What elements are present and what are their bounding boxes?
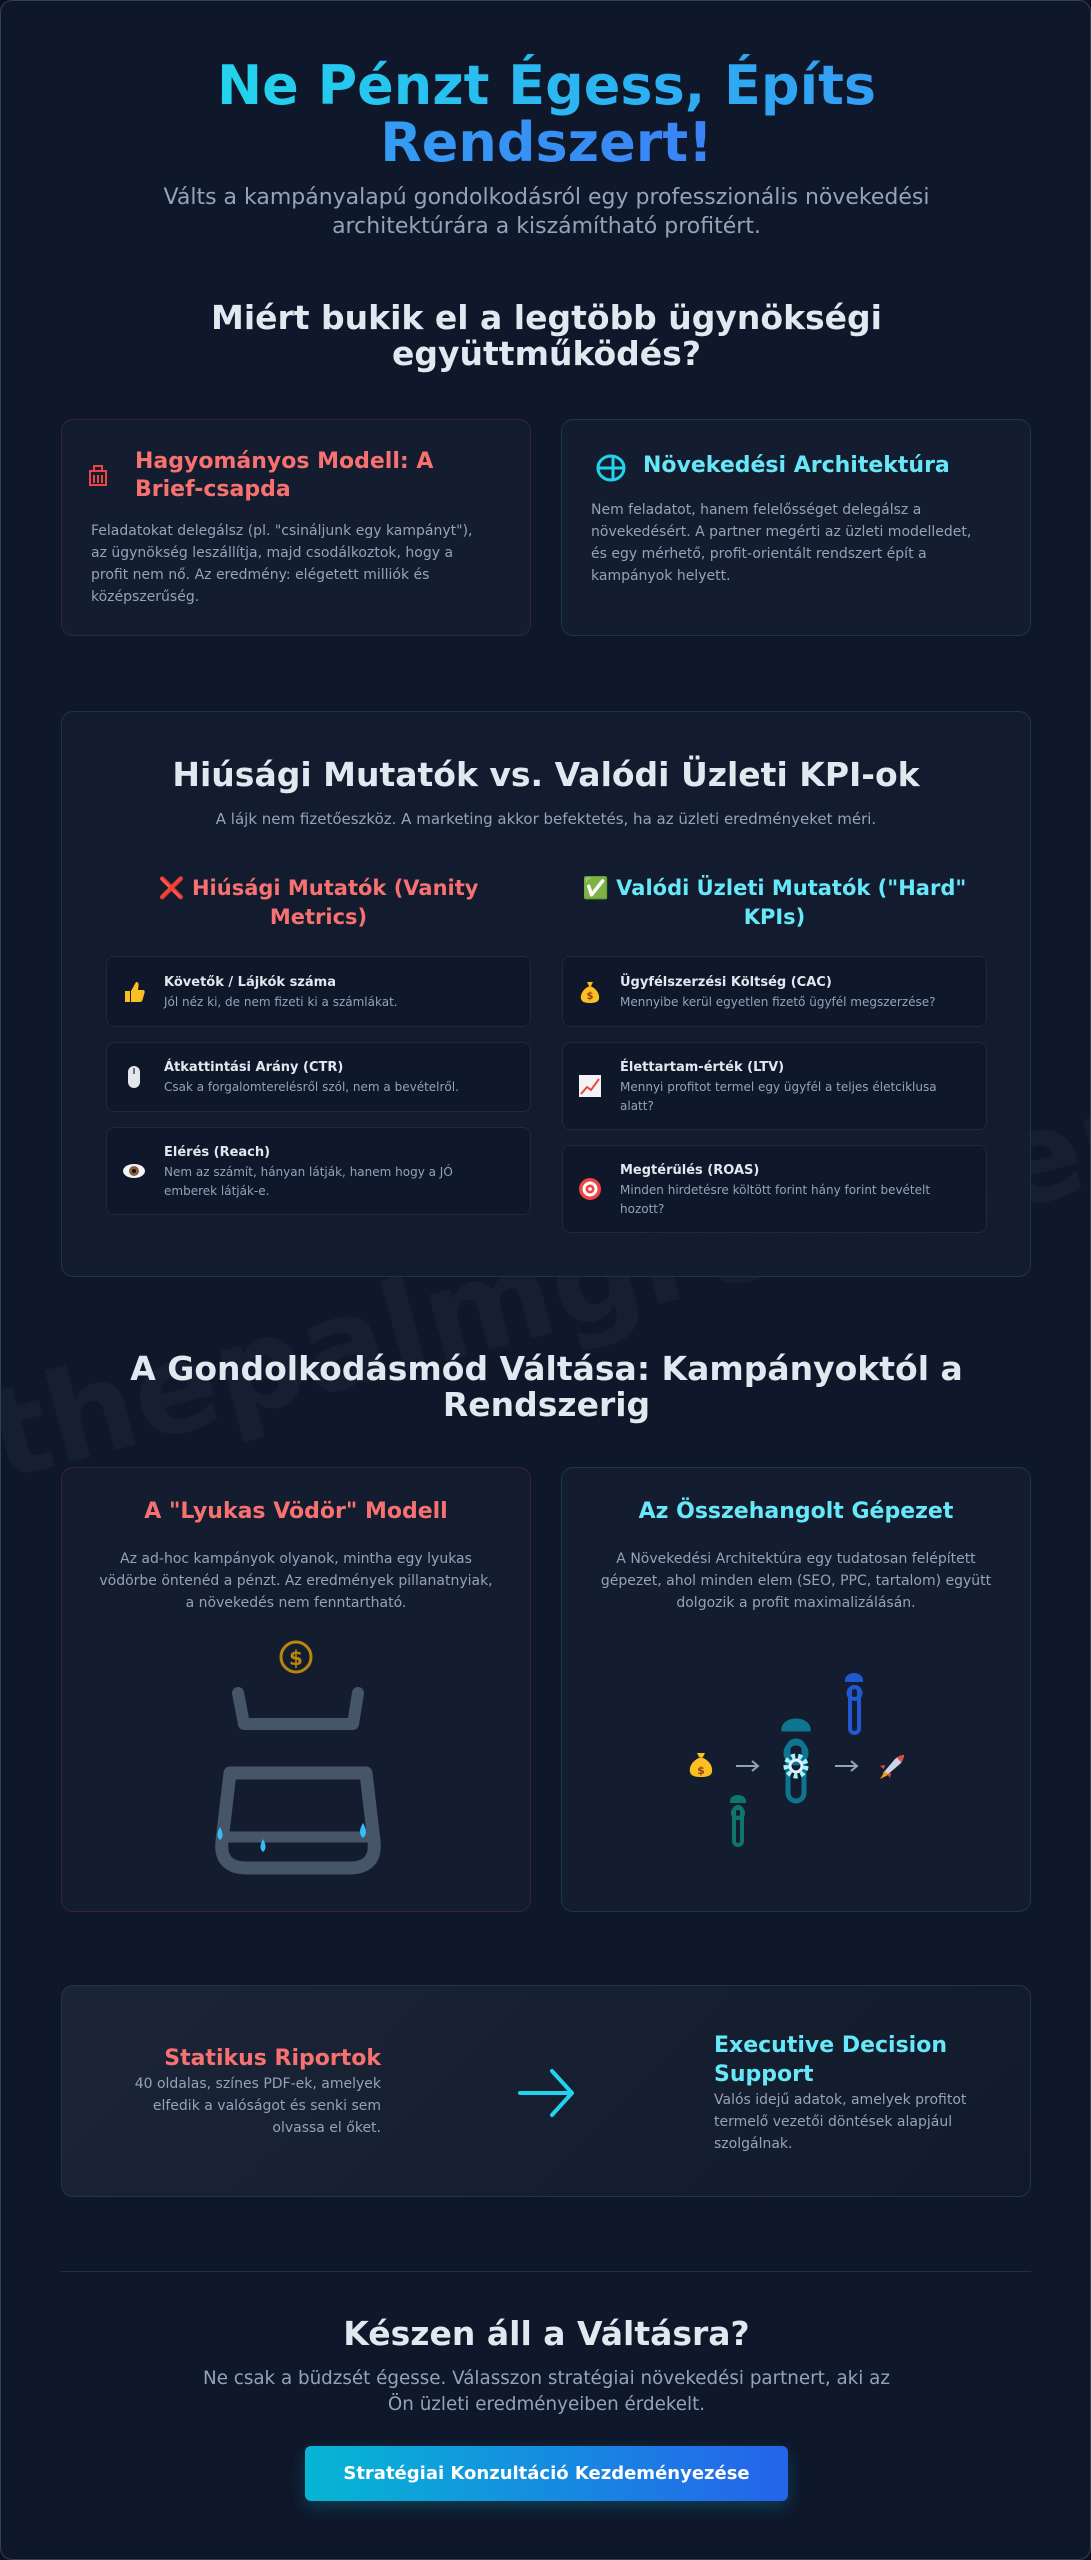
arrow 1 <box>736 1761 758 1771</box>
column heading: hard KPIs <box>583 875 966 929</box>
heading: mindset shift: Rendszerig <box>443 1385 650 1424</box>
item: followers <box>106 956 531 1027</box>
arrow <box>518 2068 574 2118</box>
heading: Az Összehangolt Gépezet <box>639 1499 953 1524</box>
coin: $ <box>289 1646 303 1670</box>
icon: globe <box>596 454 626 482</box>
CTA text: Ön üzleti eredményeiben érdekelt. <box>388 2394 705 2415</box>
item: followers: Jól néz ki, de nem fizeti ki a számlákat. <box>164 995 398 1009</box>
column heading: hard KPIs: ✅ Valódi Üzleti Mutatók ("Hard" <box>583 876 966 900</box>
heading: why agencies fail <box>211 298 882 373</box>
icon: building <box>89 465 107 486</box>
item: reach: Nem az számít, hányan látják, hanem hogy a JÓ <box>164 1165 453 1179</box>
item: ROAS: Minden hirdetésre költött forint hány forint bevételt <box>620 1183 930 1197</box>
heading <box>135 449 434 502</box>
text: középszerűség. <box>91 589 199 605</box>
column heading: vanity: Metrics) <box>270 905 367 929</box>
item: followers: Követők / Lájkók száma <box>164 975 336 990</box>
right block: executive decision support <box>714 2033 966 2152</box>
text: Feladatokat delegálsz (pl. "csináljunk egy kampányt"), <box>91 523 472 539</box>
heading: Brief-csapda <box>135 477 291 502</box>
panel: growth architecture <box>561 419 1031 636</box>
item: CTR: Átkattintási Arány (CTR) <box>164 1060 343 1075</box>
text <box>99 1551 493 1611</box>
bucket body <box>222 1773 374 1868</box>
item: LTV: alatt? <box>620 1099 654 1113</box>
item: reach: emberek látják-e. <box>164 1184 269 1198</box>
item: CAC <box>562 956 987 1027</box>
left block: static reports: elfedik a valóságot és senki sem <box>153 2098 381 2114</box>
teal piece with gear <box>784 1721 808 1801</box>
title: Ne Pénzt Égess, Építs <box>217 54 876 117</box>
text: profit nem nő. Az eredmény: elégetett milliók és <box>91 567 429 583</box>
money bag <box>690 1753 712 1777</box>
money bag: $ <box>697 1764 705 1777</box>
item: ROAS: hozott? <box>620 1202 664 1216</box>
heading: Növekedési Architektúra <box>643 453 950 478</box>
CTA text: Ne csak a büdzsét égesse. Válasszon stratégiai növekedési partnert, aki az <box>203 2368 890 2389</box>
button: Stratégiai Konzultáció Kezdeményezése <box>343 2463 750 2484</box>
drops <box>218 1823 366 1852</box>
item: CTR <box>106 1042 531 1112</box>
text: dolgozik a profit maximalizálásán. <box>676 1595 916 1611</box>
CTA text <box>203 2368 890 2415</box>
gear <box>786 1756 806 1776</box>
text <box>601 1551 991 1611</box>
heading: why agencies fail: Miért bukik el a legtöbb ügynökségi <box>211 298 882 337</box>
blue piece <box>847 1675 861 1733</box>
text <box>91 523 472 605</box>
text: kampányok helyett. <box>591 568 731 584</box>
subtitle <box>164 185 929 239</box>
icon: leaky bucket illustration <box>215 1640 381 1874</box>
icon: machine flow <box>690 1673 904 1847</box>
item: LTV: Mennyi profitot termel egy ügyfél a teljes életciklusa <box>620 1080 937 1094</box>
item: reach <box>106 1127 531 1215</box>
item: LTV <box>562 1042 987 1130</box>
item: CAC: Ügyfélszerzési Költség (CAC) <box>620 975 832 990</box>
bucket rim <box>238 1693 358 1724</box>
panel: KPI comparison <box>61 711 1031 1277</box>
panel: reports comparison <box>61 1985 1031 2197</box>
text: vödörbe öntenéd a pénzt. Az eredmények pillanatnyiak, <box>99 1573 493 1589</box>
text: gépezet, ahol minden elem (SEO, PPC, tartalom) együtt <box>601 1573 991 1589</box>
right block: executive decision support: Support <box>714 2062 813 2087</box>
text: Az ad-hoc kampányok olyanok, mintha egy lyukas <box>120 1551 472 1567</box>
item: reach: Elérés (Reach) <box>164 1145 270 1160</box>
right block: executive decision support: szolgálnak. <box>714 2136 792 2152</box>
button <box>305 2446 788 2501</box>
title <box>217 54 876 174</box>
left block: static reports: Statikus Riportok <box>164 2046 381 2071</box>
title: Rendszert! <box>380 111 713 174</box>
right block: executive decision support: termelő vezetői döntések alapjául <box>714 2114 952 2130</box>
heading: Hiúsági Mutatók vs. Valódi Üzleti KPI-ok <box>172 755 920 794</box>
text: és egy mérhető, profit-orientált rendszert épít a <box>591 546 927 562</box>
heading: why agencies fail: együttműködés? <box>392 334 701 373</box>
coin <box>281 1642 311 1672</box>
item: ROAS: Megtérülés (ROAS) <box>620 1163 759 1178</box>
text: A Növekedési Architektúra egy tudatosan felépített <box>616 1551 976 1567</box>
arrow 2 <box>835 1761 857 1771</box>
heading: mindset shift <box>130 1349 963 1424</box>
item: CAC: $ <box>587 991 594 1002</box>
item: CTR: Csak a forgalomterelésről szól, nem a bevételről. <box>164 1080 459 1094</box>
panel: traditional model <box>61 419 531 636</box>
heading: Hagyományos Modell: A <box>135 449 433 474</box>
left block: static reports: olvassa el őket. <box>272 2120 381 2136</box>
subtitle: A lájk nem fizetőeszköz. A marketing akkor befektetés, ha az üzleti eredményeket méri. <box>216 810 876 828</box>
heading: A "Lyukas Vödör" Modell <box>144 1499 448 1524</box>
right block: executive decision support: Executive Decision <box>714 2033 947 2058</box>
item: ROAS <box>562 1145 987 1233</box>
rocket <box>880 1755 904 1779</box>
text: Nem feladatot, hanem felelősséget delegálsz a <box>591 502 921 518</box>
subtitle: architektúrára a kiszámítható profitért. <box>332 214 761 239</box>
text <box>591 502 971 584</box>
green piece <box>732 1797 744 1845</box>
subtitle: Válts a kampányalapú gondolkodásról egy professzionális növekedési <box>164 185 929 210</box>
left block: static reports: 40 oldalas, színes PDF-ek, amelyek <box>135 2076 381 2092</box>
column heading: vanity: ❌ Hiúsági Mutatók (Vanity <box>159 876 478 900</box>
text: növekedésért. A partner megérti az üzleti modelledet, <box>591 524 971 540</box>
panel: coordinated machine <box>561 1467 1031 1912</box>
left block: static reports <box>135 2046 382 2136</box>
item: CAC: Mennyibe kerül egyetlen fizető ügyfél megszerzése? <box>620 995 936 1009</box>
heading: mindset shift: A Gondolkodásmód Váltása: Kampányoktól a <box>130 1349 963 1388</box>
column heading: vanity <box>159 876 478 929</box>
heading: CTA: Készen áll a Váltásra? <box>343 2314 750 2353</box>
column heading: hard KPIs: KPIs) <box>744 905 805 929</box>
text: a növekedés nem fenntartható. <box>186 1595 406 1611</box>
right block: executive decision support: Valós idejű adatok, amelyek profitot <box>714 2092 966 2108</box>
item: LTV: Élettartam-érték (LTV) <box>620 1060 784 1075</box>
text: az ügynökség leszállítja, majd csodálkoztok, hogy a <box>91 545 453 561</box>
panel: leaky bucket <box>61 1467 531 1912</box>
